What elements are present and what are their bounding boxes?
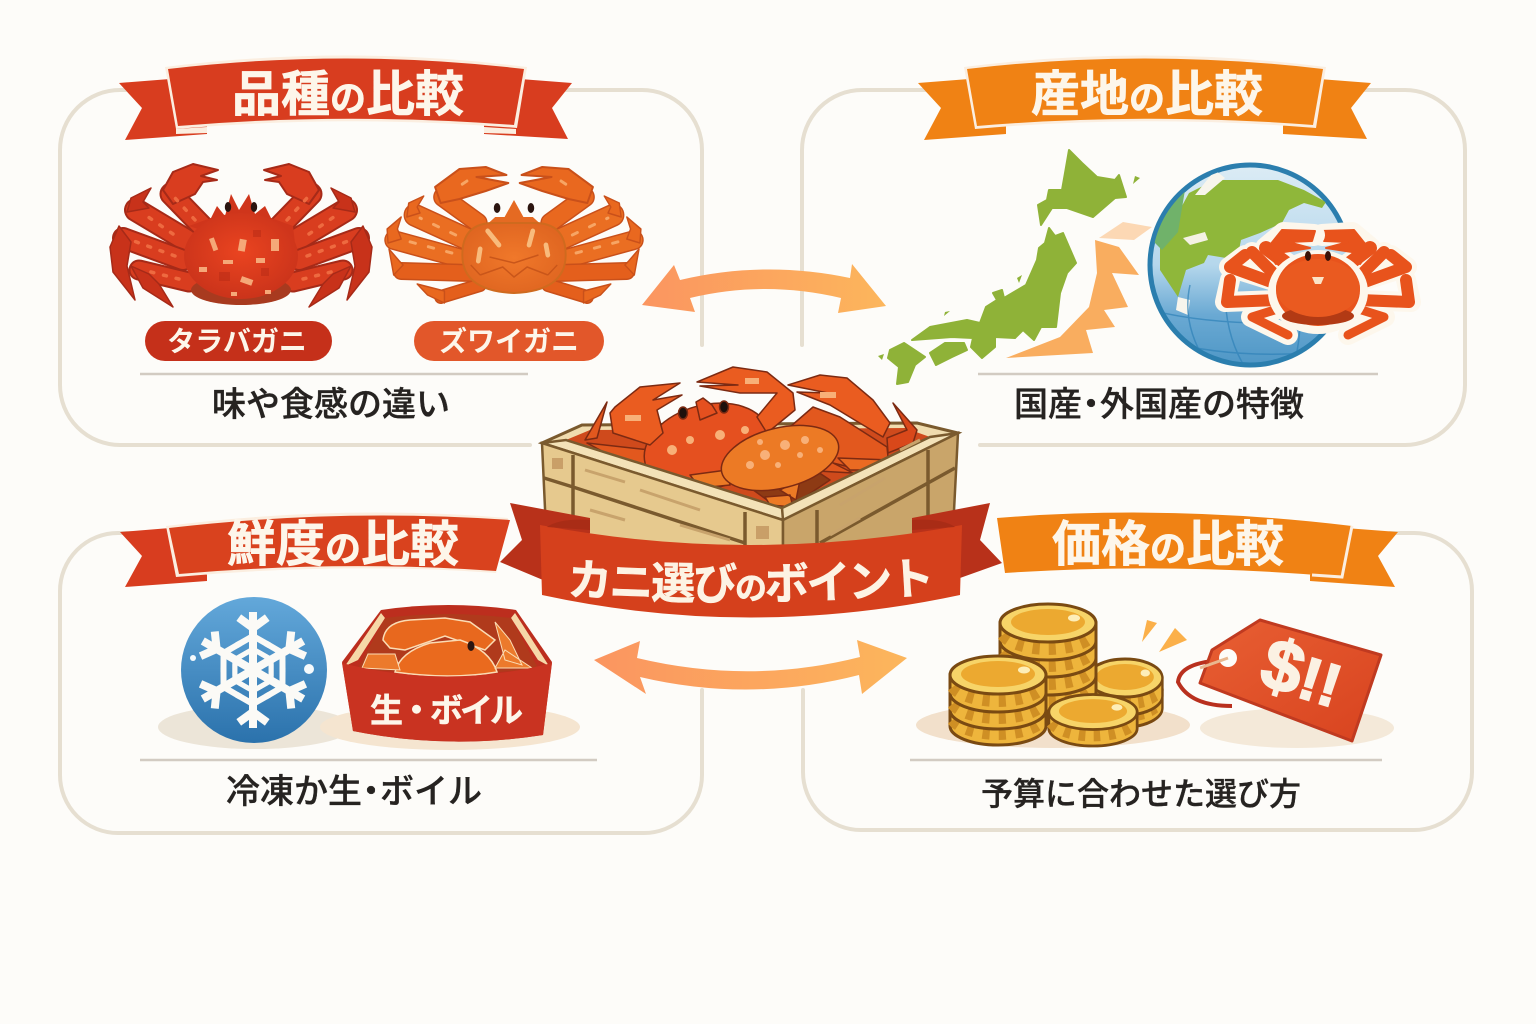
title text: カニ選びのボイント [570, 559, 928, 604]
shadow under coins and tag [916, 702, 1394, 748]
japan map [878, 150, 1140, 384]
crab tray with label [342, 605, 552, 742]
current wave [1006, 222, 1152, 358]
crab on globe [1225, 230, 1411, 335]
king crab illustration [110, 164, 372, 307]
icon: sparks [1142, 620, 1187, 652]
tag text: $!! [1252, 623, 1352, 723]
heading: price: 価格の比較 [1052, 518, 1284, 572]
heading: variety: 品種の比較 [232, 68, 464, 122]
caption: variety: 味や食感の違い [212, 386, 450, 424]
pill: タラバガニ: タラバガニ [167, 326, 307, 357]
caption: price: 予算に合わせた選び方 [981, 776, 1301, 812]
crabs in crate [585, 367, 917, 507]
panel: origin comparison [802, 56, 1465, 445]
panel outline: freshness [60, 533, 702, 833]
label: 生・ボイル: 生・ボイル [370, 692, 522, 729]
pill: ズワイガニ [414, 321, 604, 361]
ribbon: freshness heading [120, 513, 510, 587]
panel: price comparison [803, 513, 1472, 830]
heading: origin: 産地の比較 [1031, 68, 1263, 122]
pill: ズワイガニ: ズワイガニ [439, 325, 579, 357]
icon: price tag [1178, 620, 1381, 741]
caption: freshness: 冷凍か生・ボイル [226, 773, 482, 811]
panel outline: variety [60, 90, 702, 445]
panel outline: origin [802, 90, 1465, 445]
globe [1150, 165, 1350, 375]
crate front rim and walls [542, 433, 958, 520]
ribbon: variety heading [119, 56, 572, 140]
pill: タラバガニ [145, 321, 332, 361]
shadow under icons [158, 704, 580, 750]
ribbon: price heading [997, 513, 1398, 587]
caption: origin: 国産・外国産の特徴 [1014, 386, 1304, 424]
arrow: top double-headed [642, 264, 886, 313]
icon: snowflake ball [181, 597, 327, 743]
ribbon: origin heading [918, 56, 1371, 140]
panel: freshness comparison [60, 513, 702, 833]
icon: gold coins [950, 604, 1162, 746]
heading: freshness: 鮮度の比較 [227, 518, 459, 572]
panel outline: price [803, 533, 1472, 830]
snow crab illustration [387, 167, 641, 303]
panel: variety comparison [60, 56, 702, 445]
center ribbon: title [500, 503, 1002, 618]
crate back rim [542, 423, 958, 520]
center: crab crate [542, 367, 958, 560]
arrow: bottom double-headed [594, 640, 907, 694]
